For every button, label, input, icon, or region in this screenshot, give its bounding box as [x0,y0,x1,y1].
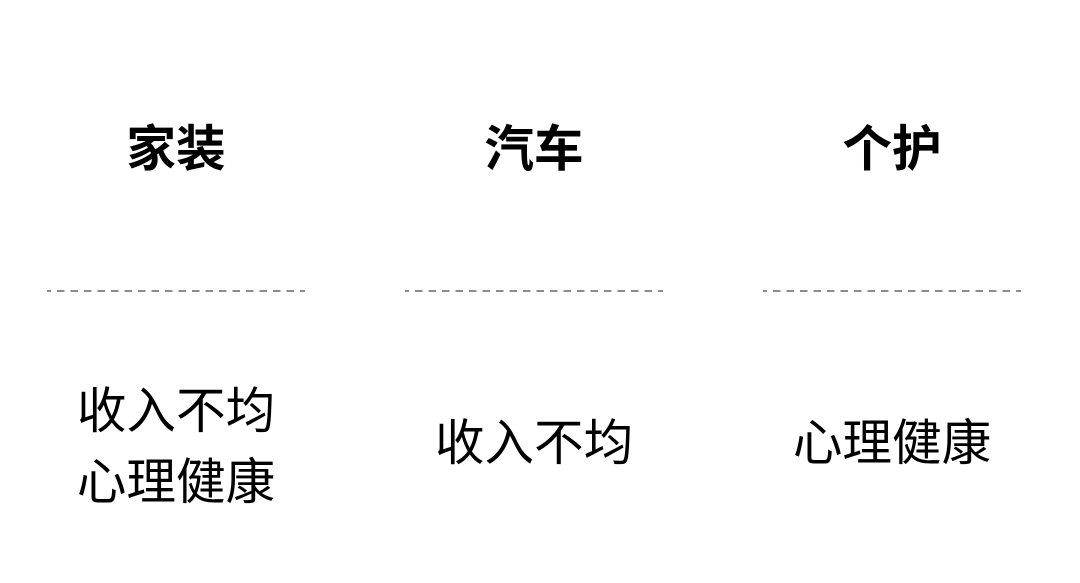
text block: column 1 [77,383,275,510]
divider: column 2 [405,290,663,292]
text block: column 2: 收入不均 [435,415,633,471]
heading: 个护: 个护 [842,121,942,177]
divider: column 3 [763,290,1021,292]
text block: column 1: 心理健康 [77,454,275,510]
divider: column 1 [47,290,305,292]
text block: column 3: 心理健康 [793,415,991,471]
heading: 家装: 家装 [126,121,226,177]
heading: 汽车: 汽车 [484,121,584,177]
text block: column 1: 收入不均 [77,383,275,439]
